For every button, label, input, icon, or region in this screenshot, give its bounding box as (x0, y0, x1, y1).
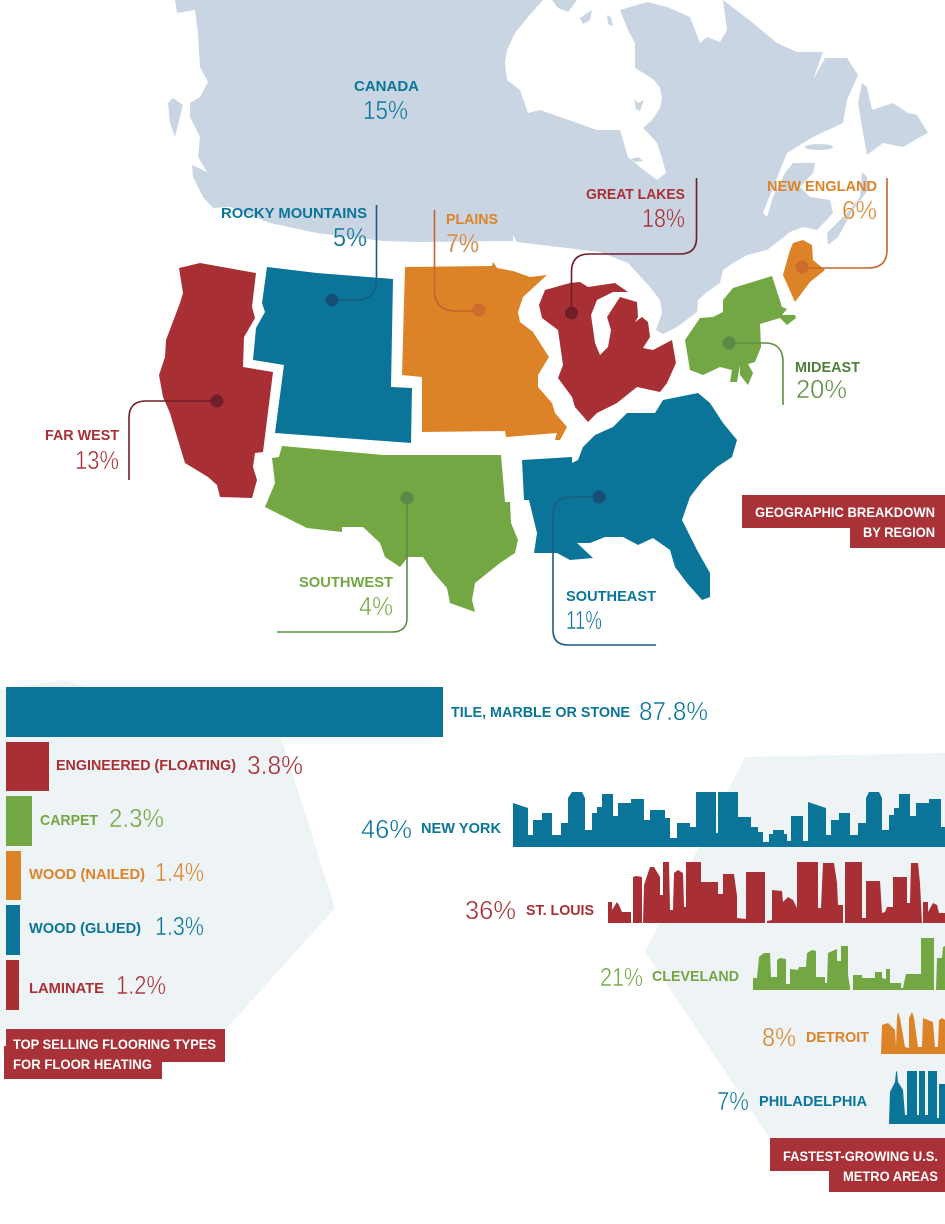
callout: Southeast 11%: 11% (566, 607, 602, 635)
bar: wood glued 1.3%: WOOD (GLUED) (29, 920, 141, 937)
bar: laminate 1.2%: LAMINATE (29, 980, 104, 997)
bar: tile, marble or stone 87.8% (6, 687, 708, 737)
panel: top selling flooring types bar chart (0, 680, 708, 1079)
heading: top selling flooring types: TOP SELLING FLOORING TYPES (13, 1036, 216, 1052)
label: Canada 15% (354, 78, 419, 125)
callout: Plains 7%: PLAINS (446, 211, 498, 228)
map: New England region (783, 240, 825, 302)
callout: Rocky Mountains 5%: ROCKY MOUNTAINS (221, 205, 367, 222)
bar: wood nailed 1.4% (6, 851, 204, 900)
row: New York 46% (361, 792, 945, 847)
map: Rocky Mountains region (253, 267, 412, 443)
callout: New England 6% (767, 178, 887, 274)
callout: Mideast 20%: 20% (796, 376, 847, 404)
bar: wood nailed 1.4%: WOOD (NAILED) (29, 866, 145, 883)
panel: geographic breakdown map (45, 0, 945, 645)
callout: Plains 7% (434, 210, 498, 316)
skyline: St. Louis (608, 862, 945, 923)
callout: Far West 13% (45, 394, 224, 480)
skyline: Detroit (881, 1012, 945, 1054)
callout: Southeast 11%: SOUTHEAST (566, 588, 656, 605)
bar: wood glued 1.3% (6, 905, 204, 955)
heading: geographic breakdown by region: GEOGRAPHIC BREAKDOWN (755, 504, 935, 520)
map: Plains region (402, 262, 567, 440)
background shape: flooring panel (0, 680, 335, 1040)
map: Mideast region (685, 276, 796, 385)
row: New York 46%: NEW YORK (421, 820, 501, 837)
callout: Far West 13%: FAR WEST (45, 427, 119, 444)
row: St. Louis 36% (465, 862, 945, 925)
skyline: New York (513, 792, 945, 847)
heading: fastest-growing U.S. metro areas: METRO AREAS (843, 1168, 938, 1184)
callout: Far West 13%: 13% (75, 447, 119, 475)
callout: New England 6%: NEW ENGLAND (767, 178, 877, 195)
row: Cleveland 21% (600, 938, 945, 992)
heading: top selling flooring types (4, 1029, 225, 1079)
row: New York 46%: 46% (361, 816, 412, 844)
callout: New England 6%: 6% (842, 197, 877, 225)
map: Southeast region (522, 393, 737, 600)
bar: laminate 1.2%: 1.2% (116, 972, 166, 1000)
map: Southwest region (265, 446, 518, 612)
heading: top selling flooring types: FOR FLOOR HEATING (13, 1056, 152, 1072)
heading: fastest-growing U.S. metro areas (770, 1138, 945, 1192)
bar: engineered floating 3.8%: ENGINEERED (FLOATING) (56, 757, 236, 774)
label: Canada 15%: CANADA (354, 78, 419, 95)
bar: wood nailed 1.4%: 1.4% (155, 859, 204, 887)
skyline: Cleveland (753, 938, 945, 990)
bar: carpet 2.3%: 2.3% (109, 805, 164, 833)
callout: Southeast 11% (553, 490, 656, 645)
map: Great Lakes region (539, 282, 676, 422)
background shape: metro panel (645, 753, 945, 1140)
callout: Rocky Mountains 5%: 5% (333, 224, 367, 252)
row: Detroit 8% (762, 1012, 945, 1054)
bar: carpet 2.3% (6, 796, 164, 846)
row: Detroit 8%: DETROIT (806, 1029, 869, 1046)
bar: laminate 1.2% (6, 960, 166, 1010)
row: Cleveland 21%: 21% (600, 964, 643, 992)
row: Philadelphia 7%: 7% (717, 1088, 749, 1116)
callout: Southwest 4%: SOUTHWEST (299, 574, 393, 591)
callout: Rocky Mountains 5% (221, 205, 376, 306)
bar: engineered floating 3.8%: 3.8% (247, 752, 303, 780)
row: Philadelphia 7%: PHILADELPHIA (759, 1093, 867, 1110)
panel: fastest-growing metro areas (361, 753, 945, 1192)
callout: Plains 7%: 7% (446, 230, 479, 258)
callout: Great Lakes 18% (565, 178, 696, 320)
bar: wood glued 1.3%: 1.3% (155, 913, 204, 941)
heading: geographic breakdown by region (742, 495, 945, 548)
row: Detroit 8%: 8% (762, 1024, 796, 1052)
callout: Southwest 4%: 4% (359, 593, 393, 621)
callout: Mideast 20% (722, 336, 860, 405)
bar: engineered floating 3.8% (6, 742, 303, 791)
bar: tile, marble or stone 87.8%: 87.8% (639, 698, 708, 726)
map: Canada landmass (168, 0, 928, 334)
callout: Mideast 20%: MIDEAST (795, 359, 860, 376)
label: Canada 15%: 15% (363, 97, 408, 125)
row: Philadelphia 7% (717, 1071, 945, 1124)
callout: Great Lakes 18%: GREAT LAKES (586, 186, 685, 203)
row: Cleveland 21%: CLEVELAND (652, 968, 739, 985)
bar: carpet 2.3%: CARPET (40, 812, 98, 829)
row: St. Louis 36%: 36% (465, 897, 516, 925)
callout: Southwest 4% (277, 492, 414, 632)
heading: geographic breakdown by region: BY REGION (863, 524, 935, 540)
bar: tile, marble or stone 87.8%: TILE, MARBLE OR STONE (451, 704, 630, 721)
row: St. Louis 36%: ST. LOUIS (526, 902, 594, 919)
callout: Great Lakes 18%: 18% (642, 205, 685, 233)
skyline: Philadelphia (889, 1071, 945, 1124)
map: Far West region (159, 263, 273, 498)
